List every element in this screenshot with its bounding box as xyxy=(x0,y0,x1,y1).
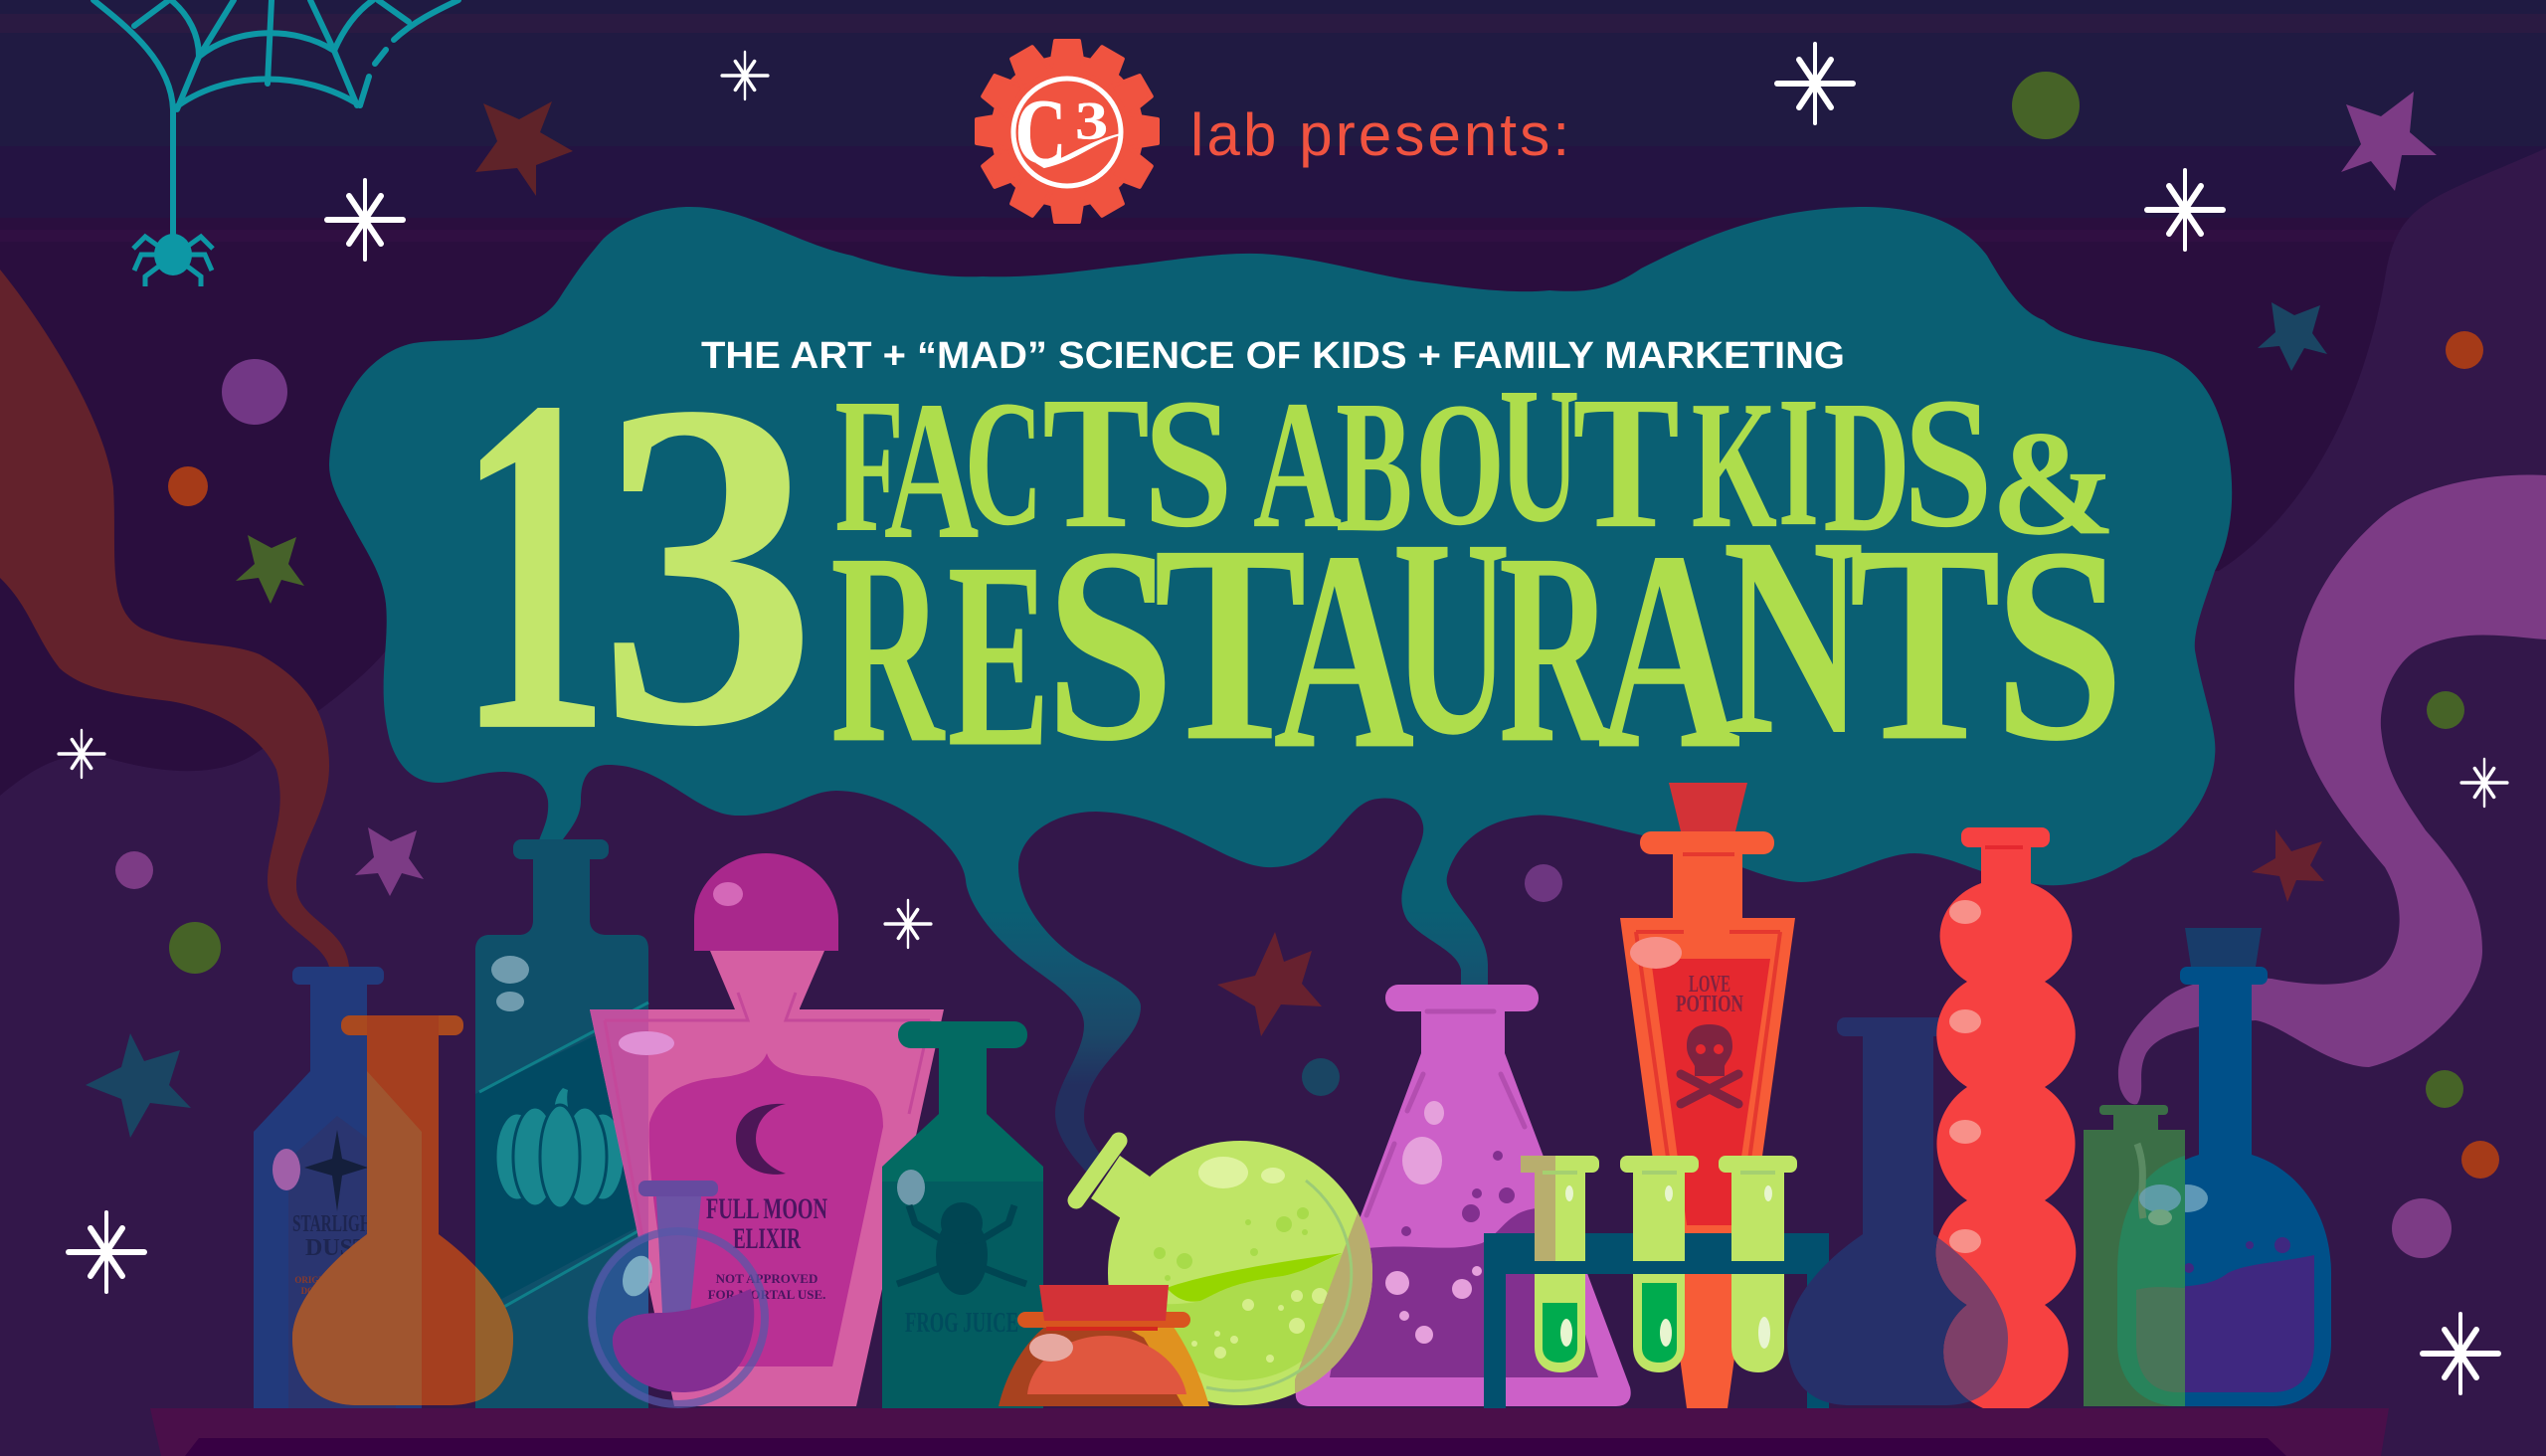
title line: facts about kids and: U xyxy=(1499,347,1579,563)
bottle: love potion xyxy=(1620,783,1795,1408)
shelf xyxy=(150,1408,2389,1456)
bottle: full moon elixir: FULL MOON xyxy=(706,1192,827,1225)
title line: facts about kids and: A xyxy=(1253,363,1342,566)
bottle: full moon elixir: FOR MORTAL USE. xyxy=(708,1287,825,1302)
bottle: small green xyxy=(2084,1105,2188,1406)
bottle: starlight dust: DUST xyxy=(305,1235,369,1261)
bottle: starlight dust: DO NOT INHALE xyxy=(301,1286,373,1296)
bottle: navy flask xyxy=(1787,1017,1970,1405)
title line: restaurants: A xyxy=(1597,493,1740,809)
title line: facts about kids and: F xyxy=(834,359,904,572)
logo lettering: C3 xyxy=(1014,80,1108,183)
bottle: red bubble xyxy=(1936,827,2076,1408)
bottle: full moon elixir: NOT APPROVED xyxy=(716,1271,818,1286)
decorative stars xyxy=(86,91,2437,1138)
logo lettering: C3: 3 xyxy=(1075,91,1108,150)
title line: restaurants xyxy=(830,478,2124,809)
title line: restaurants: S xyxy=(1045,490,1175,799)
smoke: purple right xyxy=(2118,474,2546,1104)
title line: facts about kids and: I xyxy=(1778,358,1819,565)
bottle: frog juice xyxy=(882,1021,1043,1408)
bottle: pumpkin xyxy=(475,839,648,1408)
logo: gear mark xyxy=(977,41,1158,222)
logo lettering: C3: C xyxy=(1014,80,1066,183)
bottle: full moon elixir xyxy=(590,853,944,1406)
title line: restaurants: R xyxy=(1499,497,1613,801)
title line: facts about kids and: D xyxy=(1823,362,1910,572)
panel: teal smoke cloud xyxy=(329,207,2232,1174)
title line: facts about kids and: O xyxy=(1415,366,1505,562)
title line: facts about kids and: T xyxy=(1572,358,1680,568)
title line: facts about kids and: C xyxy=(965,364,1043,563)
title line: facts about kids and: K xyxy=(1692,363,1777,566)
title line: facts about kids and xyxy=(834,347,2116,741)
jar: red stopper xyxy=(999,1285,1209,1406)
title line: restaurants: R xyxy=(830,497,944,801)
title number: 13: 1 xyxy=(455,298,611,832)
title line: facts about kids and: B xyxy=(1336,362,1412,572)
bottle: round purple flask xyxy=(589,1181,768,1407)
bottle: frog juice: FROG JUICE xyxy=(905,1308,1018,1339)
title line: facts about kids and: A xyxy=(884,360,979,581)
title line: facts about kids and: T xyxy=(1042,358,1150,568)
bottle: love potion: LOVE xyxy=(1689,972,1730,998)
smoke: red left xyxy=(0,270,349,967)
title number: 13 xyxy=(455,298,818,832)
bottle: starlight dust xyxy=(254,967,422,1408)
title line: restaurants: A xyxy=(1273,493,1414,809)
icon: spider web xyxy=(93,0,458,109)
bottle: love potion: POTION xyxy=(1676,992,1743,1017)
bottle: orange flask xyxy=(288,1015,517,1408)
title line: facts about kids and: S xyxy=(1903,359,1993,566)
bottle: green round flask xyxy=(1076,1141,1392,1412)
bottle: full moon elixir: ELIXIR xyxy=(733,1222,801,1255)
bottle: blue round flask xyxy=(2117,928,2331,1406)
title line: restaurants: T xyxy=(1154,487,1307,801)
bottle: starlight dust: STARLIGHT xyxy=(292,1211,382,1237)
bottle: starlight dust: ORIGIN UNKNOWN xyxy=(294,1275,380,1285)
title line: restaurants: T xyxy=(1849,487,2001,801)
test tube rack xyxy=(1484,1156,1829,1408)
title number: 13: 3 xyxy=(598,307,818,823)
flask: purple conical xyxy=(1296,985,1631,1406)
title line: restaurants: E xyxy=(947,508,1050,803)
icon: spider xyxy=(133,109,213,286)
title line: restaurants: U xyxy=(1392,481,1511,794)
decorative dots xyxy=(115,72,2499,1258)
title line: facts about kids and: & xyxy=(1991,400,2116,566)
heading: lab presents: lab presents: xyxy=(1190,101,1569,168)
title line: restaurants: S xyxy=(1994,490,2124,799)
title line: facts about kids and: S xyxy=(1143,360,1233,566)
title line: restaurants: N xyxy=(1723,478,1864,795)
subtitle: THE ART + “MAD” SCIENCE OF KIDS + FAMILY MARKETING xyxy=(701,335,1845,377)
